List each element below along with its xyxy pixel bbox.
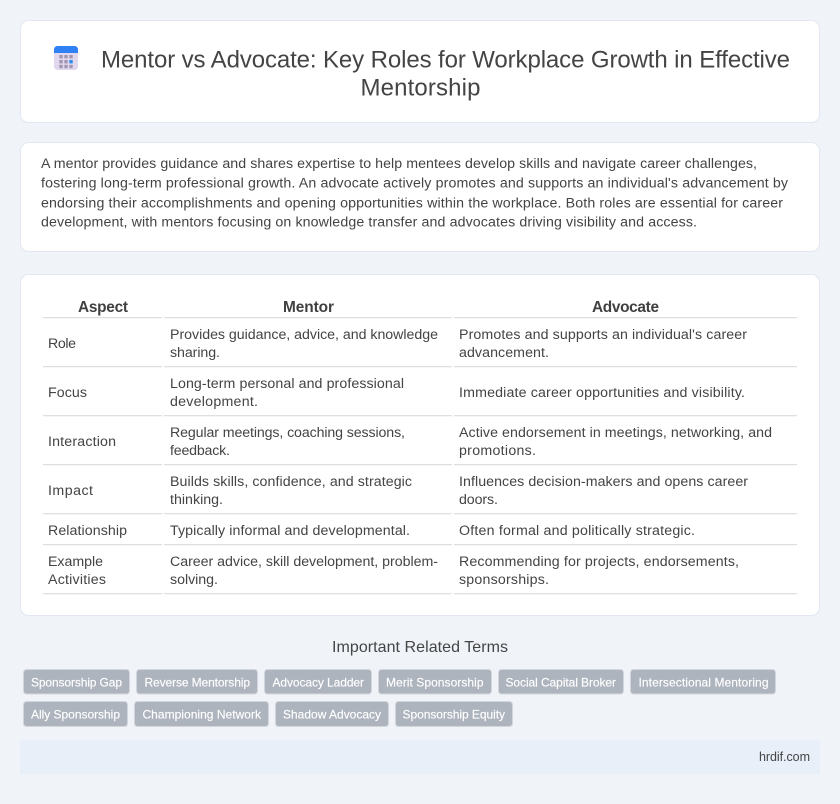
table header bbox=[43, 299, 797, 318]
row: role bbox=[43, 327, 797, 367]
panel: description: endorsing their accomplishments and opening opportunities within the workplace. Both roles are essential for career bbox=[41, 196, 783, 212]
row: focus bbox=[43, 376, 797, 416]
row: impact: thinking. bbox=[170, 492, 223, 508]
row: interaction bbox=[43, 425, 797, 465]
row: impact: Builds skills, confidence, and strategic bbox=[170, 474, 412, 490]
related term tags: Reverse Mentorship bbox=[144, 676, 250, 690]
panel: description: A mentor provides guidance and shares expertise to help mentees develop skills and navigate career challenges, bbox=[41, 156, 757, 172]
related term tags: Social Capital Broker bbox=[506, 676, 616, 690]
table header: Aspect bbox=[78, 299, 128, 316]
row: role: advancement. bbox=[459, 345, 549, 361]
row: impact bbox=[43, 474, 797, 514]
row: focus: Long-term personal and professional bbox=[170, 376, 404, 392]
row: relationship bbox=[43, 523, 797, 545]
panel: description: fostering long-term professional growth. An advocate actively promotes and supports an individual's advancement by bbox=[41, 176, 789, 192]
row: example activities bbox=[43, 554, 797, 594]
row: impact: Impact bbox=[48, 483, 93, 499]
related term tags: Championing Network bbox=[142, 708, 262, 722]
row: role: Role bbox=[48, 336, 76, 352]
related term tags: Shadow Advocacy bbox=[283, 708, 381, 722]
table header: Advocate bbox=[592, 299, 659, 316]
row: example activities: Activities bbox=[48, 572, 106, 588]
related term tags: Ally Sponsorship bbox=[31, 708, 120, 722]
related term tags: Sponsorship Equity bbox=[402, 708, 505, 722]
related term tags: Merit Sponsorship bbox=[386, 676, 484, 690]
title bbox=[101, 46, 790, 102]
row: example activities: sponsorships. bbox=[459, 572, 549, 588]
table header: Mentor bbox=[283, 299, 334, 316]
title: Mentorship bbox=[360, 74, 480, 102]
row: interaction: feedback. bbox=[170, 443, 230, 459]
panel: description: development, with mentors focusing on knowledge transfer and advocates driving visibility and access. bbox=[41, 214, 697, 230]
row: role: sharing. bbox=[170, 345, 220, 361]
title: Mentor vs Advocate: Key Roles for Workplace Growth in Effective bbox=[101, 46, 790, 74]
row: relationship: Often formal and politically strategic. bbox=[459, 523, 695, 539]
row: interaction: Regular meetings, coaching sessions, bbox=[170, 425, 405, 441]
row: relationship: Typically informal and developmental. bbox=[170, 523, 410, 539]
related term tags: Advocacy Ladder bbox=[272, 676, 364, 690]
footer: hrdif.com bbox=[759, 750, 810, 764]
footer bbox=[20, 740, 820, 774]
related term tags bbox=[24, 670, 776, 726]
row: example activities: Recommending for projects, endorsements, bbox=[459, 554, 739, 570]
panel: title header bbox=[20, 20, 820, 122]
row: interaction: promotions. bbox=[459, 443, 536, 459]
row: example activities: solving. bbox=[170, 572, 218, 588]
row: role: Promotes and supports an individual's career bbox=[459, 327, 747, 343]
row: interaction: Interaction bbox=[48, 434, 116, 450]
row: impact: doors. bbox=[459, 492, 498, 508]
row: focus: development. bbox=[170, 394, 258, 410]
related term tags: Intersectional Mentoring bbox=[638, 676, 768, 690]
panel: comparison table bbox=[20, 274, 820, 616]
row: role: Provides guidance, advice, and knowledge bbox=[170, 327, 438, 343]
row: interaction: Active endorsement in meetings, networking, and bbox=[459, 425, 772, 441]
panel: description bbox=[20, 142, 820, 252]
icon: calendar bbox=[54, 46, 78, 70]
row: example activities: Career advice, skill development, problem- bbox=[170, 554, 438, 570]
related term tags: Sponsorship Gap bbox=[31, 676, 122, 690]
heading: related terms: Important Related Terms bbox=[332, 639, 508, 656]
row: relationship: Relationship bbox=[48, 523, 127, 539]
row: focus: Immediate career opportunities and visibility. bbox=[459, 385, 745, 401]
row: focus: Focus bbox=[48, 385, 87, 401]
row: example activities: Example bbox=[48, 554, 103, 570]
row: impact: Influences decision-makers and opens career bbox=[459, 474, 748, 490]
